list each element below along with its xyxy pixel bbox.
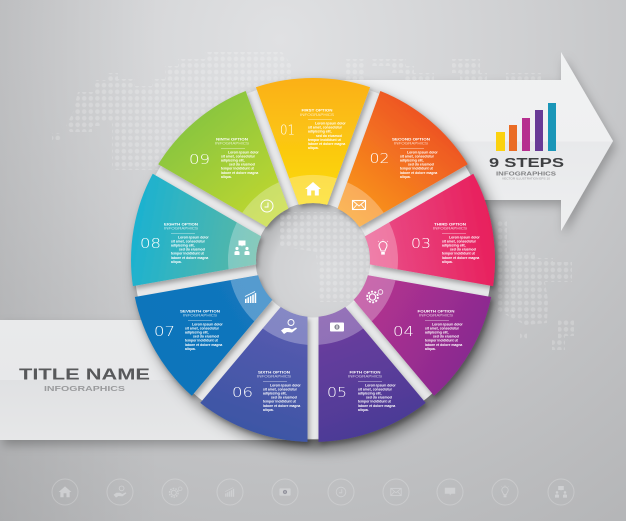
sector 2: Lorem ipsum dolor — [407, 150, 438, 154]
bottom icon row — [52, 479, 574, 505]
sector 8: 08 — [140, 236, 161, 252]
bar chart logo — [496, 103, 556, 151]
sector 7: INFOGRAPHICS — [183, 314, 218, 318]
sector 4: 04 — [393, 324, 414, 340]
sector 5: labore et dolore magna — [358, 404, 395, 408]
sector 5 — [278, 292, 429, 451]
sector 8: labore et dolore magna — [171, 256, 208, 260]
sector 3: sit amet, consectetur — [442, 239, 477, 243]
9 steps label: INFOGRAPHICS — [496, 172, 556, 178]
sector 7: sed do eiusmod — [193, 335, 219, 339]
sector 2: SECOND OPTION — [392, 138, 431, 142]
sector 6: labore et dolore magna — [263, 404, 300, 408]
sector 7: tempor incididunt ut — [185, 339, 219, 343]
sector 8: sed do eiusmod — [179, 248, 205, 252]
sector 2: sit amet, consectetur — [400, 154, 435, 158]
sector 1: INFOGRAPHICS — [300, 113, 335, 117]
sector 9: labore et dolore magna — [221, 171, 258, 175]
title text: INFOGRAPHICS — [44, 384, 125, 393]
sector 9: sit amet, consectetur — [221, 154, 256, 158]
sector 4: adipiscing elit, — [425, 330, 449, 334]
sector 7: labore et dolore magna — [185, 343, 222, 347]
sector 1: tempor incididunt ut — [308, 138, 342, 142]
arrow — [313, 52, 613, 231]
icon: money — [330, 322, 344, 332]
sector 9: sed do eiusmod — [229, 163, 255, 167]
9 steps label: 9 STEPS — [489, 155, 564, 170]
sector 8: INFOGRAPHICS — [164, 226, 199, 230]
sector 4: aliqua. — [425, 347, 436, 351]
sector 3: aliqua. — [442, 260, 453, 264]
sector 3: tempor incididunt ut — [442, 252, 476, 256]
sector 5: adipiscing elit, — [358, 391, 382, 395]
sector 4: FOURTH OPTION — [418, 309, 455, 313]
icon: hand with coin — [281, 320, 297, 334]
sector 2: sed do eiusmod — [408, 163, 434, 167]
icon: home — [305, 182, 321, 196]
disc shadow — [137, 86, 501, 450]
sector 1: 01 — [280, 122, 295, 138]
sector 2: aliqua. — [400, 175, 411, 179]
sector 1: Lorem ipsum dolor — [315, 122, 346, 126]
sector 6: adipiscing elit, — [263, 391, 287, 395]
sector 1: labore et dolore magna — [308, 142, 345, 146]
icon: gears — [367, 290, 383, 302]
sector 6: sed do eiusmod — [271, 396, 297, 400]
sector 7: 07 — [154, 324, 175, 340]
world map dots — [52, 52, 574, 350]
sector 8: EIGHTH OPTION — [164, 222, 198, 226]
sector 1: sed do eiusmod — [316, 134, 342, 138]
sector 9: aliqua. — [221, 175, 232, 179]
sector 9: tempor incididunt ut — [221, 167, 255, 171]
sector 7: SEVENTH OPTION — [180, 309, 221, 313]
sector 5: sed do eiusmod — [366, 396, 392, 400]
sector 4: sit amet, consectetur — [425, 326, 460, 330]
sector 6: sit amet, consectetur — [263, 387, 298, 391]
sector 3: THIRD OPTION — [434, 222, 466, 226]
sector 9: INFOGRAPHICS — [215, 142, 250, 146]
sector 6: aliqua. — [263, 408, 274, 412]
sector 1: aliqua. — [308, 146, 319, 150]
sector 9: NINTH OPTION — [216, 138, 248, 142]
sector 5: FIFTH OPTION — [350, 370, 381, 374]
icon: bulb — [378, 240, 388, 255]
sector 4 — [332, 238, 499, 400]
sector 6: Lorem ipsum dolor — [270, 383, 301, 387]
sector 2: adipiscing elit, — [400, 159, 424, 163]
sector 7: sit amet, consectetur — [185, 326, 220, 330]
sector 7: adipiscing elit, — [185, 330, 209, 334]
sector 1: adipiscing elit, — [308, 130, 332, 134]
sector 2 — [305, 84, 474, 254]
sector 2: labore et dolore magna — [400, 171, 437, 175]
sector 5: aliqua. — [358, 408, 369, 412]
sector 8: tempor incididunt ut — [171, 252, 205, 256]
sector 8: adipiscing elit, — [171, 244, 195, 248]
sector 1: sit amet, consectetur — [308, 126, 343, 130]
sector 8: aliqua. — [171, 260, 182, 264]
center hole — [256, 202, 372, 318]
sector 3: Lorem ipsum dolor — [449, 235, 480, 239]
icon: clock — [261, 200, 273, 212]
icon: org chart — [234, 240, 250, 255]
sector 4: tempor incididunt ut — [425, 339, 459, 343]
sector 4: INFOGRAPHICS — [419, 314, 454, 318]
sector 3: INFOGRAPHICS — [433, 226, 468, 230]
sector 2: INFOGRAPHICS — [394, 142, 429, 146]
sector 4: Lorem ipsum dolor — [432, 322, 463, 326]
bottom icons — [59, 485, 567, 498]
sector 9: adipiscing elit, — [221, 159, 245, 163]
sector 6 — [197, 292, 348, 451]
sector 1: FIRST OPTION — [302, 108, 333, 112]
title text: TITLE NAME — [19, 366, 150, 384]
sector 2: tempor incididunt ut — [400, 167, 434, 171]
sector 5: sit amet, consectetur — [358, 387, 393, 391]
sector 4: labore et dolore magna — [425, 343, 462, 347]
sector 2: 02 — [370, 151, 390, 167]
sector 5: tempor incididunt ut — [358, 400, 392, 404]
sector 3: labore et dolore magna — [442, 256, 479, 260]
icon: chart — [245, 292, 256, 303]
9 steps label — [489, 155, 564, 180]
sector 8: sit amet, consectetur — [171, 239, 206, 243]
sector 7: Lorem ipsum dolor — [192, 322, 223, 326]
sector 5: INFOGRAPHICS — [348, 374, 383, 378]
sector 6: SIXTH OPTION — [258, 370, 291, 374]
9 steps label: VECTOR ILLUSTRATION EPS 10 — [502, 176, 551, 180]
sector 3: sed do eiusmod — [450, 248, 476, 252]
sector 8 — [124, 172, 269, 307]
sector 7 — [127, 238, 294, 400]
sector 5: 05 — [327, 385, 347, 401]
sector 5: Lorem ipsum dolor — [365, 383, 396, 387]
sector 3 — [357, 172, 502, 307]
sector 6: tempor incididunt ut — [263, 400, 297, 404]
title band — [0, 320, 322, 440]
title text — [19, 366, 150, 393]
sector 3: adipiscing elit, — [442, 244, 466, 248]
sector 6: 06 — [232, 385, 253, 401]
sector 7: aliqua. — [185, 347, 196, 351]
icon: mail — [352, 200, 366, 210]
sector 9 — [152, 84, 321, 254]
sector 3: 03 — [411, 236, 431, 252]
sector 9: Lorem ipsum dolor — [228, 150, 259, 154]
sector 6: INFOGRAPHICS — [257, 374, 292, 378]
disc base — [134, 81, 492, 439]
sector 9: 09 — [189, 152, 210, 168]
sector 1 — [256, 78, 370, 205]
sector 8: Lorem ipsum dolor — [178, 235, 209, 239]
sector 4: sed do eiusmod — [433, 335, 459, 339]
